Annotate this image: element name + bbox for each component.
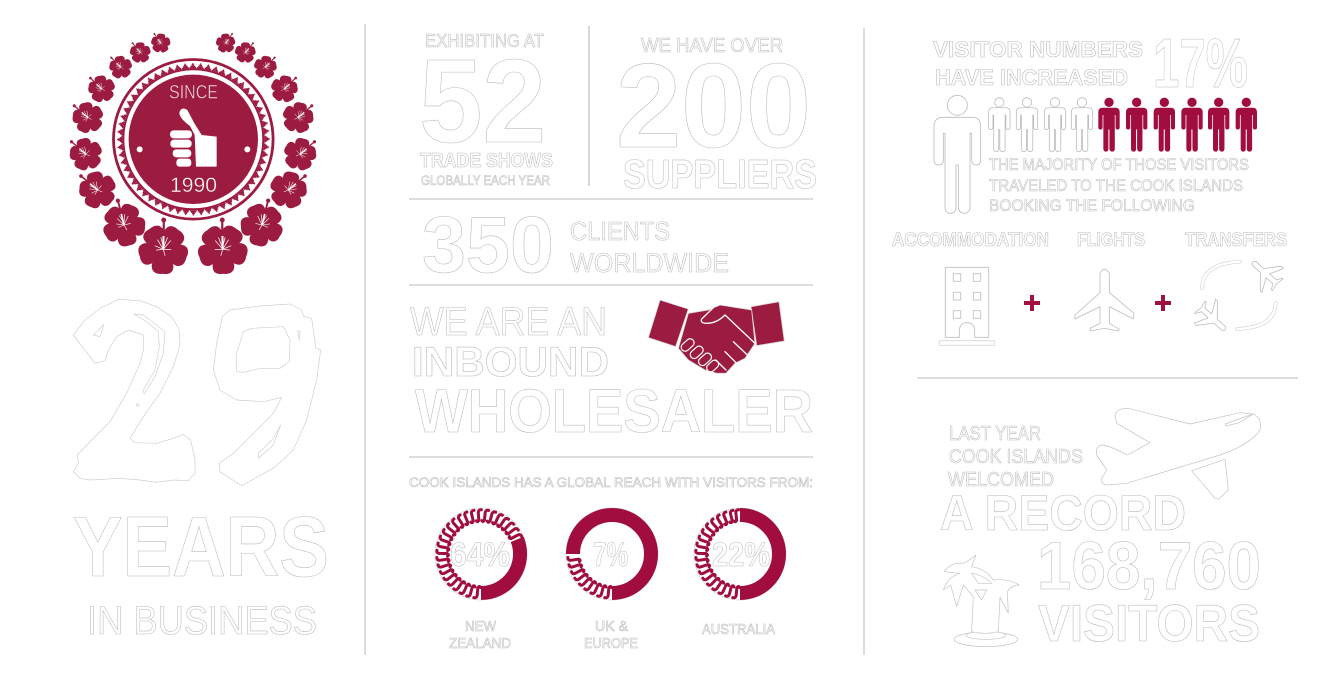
big number: 350: 350 [422,200,554,289]
heading: years: YEARS [73,500,329,595]
column dividers [365,24,864,655]
icon: plus [1155,295,1171,311]
text: visitors: VISITORS [1038,595,1260,653]
divider [409,284,813,286]
panel: years in business [67,30,329,643]
text: a record: A RECORD [940,485,1186,541]
icon: transfers cycle [1189,250,1289,342]
text: last year cook islands welcomed [948,423,1083,491]
label: flights: FLIGHTS [1077,230,1145,251]
panel: global reach [409,474,813,652]
text: last year cook islands welcomed: WELCOMED [948,469,1054,491]
divider [917,377,1298,379]
text: last year cook islands welcomed: LAST YEAR [949,423,1041,445]
donut: uk and europe 7% [566,508,658,600]
text: trade shows: TRADE SHOWS [420,150,553,172]
seal text: 1990: 1990 [170,174,217,197]
big number: 52: 52 [419,35,546,168]
heading: in business: IN BUSINESS [87,599,317,643]
divider [588,26,590,186]
heading: global reach: COOK ISLANDS HAS A GLOBAL REACH WITH VISITORS FROM: [409,474,813,490]
text: have increased: HAVE INCREASED [935,65,1128,90]
big number: 168,760: 168,760 [1037,528,1261,604]
badge: since 1990 wreath [67,30,319,286]
icon: hotel building [939,267,995,345]
icon: thumbs up [137,108,250,167]
panel: trade shows and suppliers [419,26,817,197]
value: 64%: 64% [450,536,510,574]
text: majority of visitors [989,155,1249,215]
icon: large person [934,95,981,213]
panel: clients worldwide [422,200,729,289]
text: clients: CLIENTS [570,216,670,246]
seal disc [129,75,258,204]
divider [409,198,813,200]
icon: airplane taking off [1096,408,1261,499]
panel: record visitors [940,408,1261,653]
label: uk and europe: EUROPE [584,635,638,652]
value: 22%: 22% [712,536,770,574]
text: majority of visitors: BOOKING THE FOLLOWING [989,196,1195,215]
big number: 17%: 17% [1153,24,1248,102]
donut: australia 22% [694,508,786,600]
panel: visitor numbers [933,24,1257,215]
label: uk and europe [584,618,638,652]
text: visitor numbers: VISITOR NUMBERS [933,37,1143,62]
seal text: since: SINCE [169,82,218,104]
label: accommodation: ACCOMMODATION [892,230,1049,251]
text: we have over: WE HAVE OVER [641,35,783,57]
panel: bookings [892,230,1289,345]
text: majority of visitors: THE MAJORITY OF THOSE VISITORS [989,155,1249,174]
divider [409,456,813,458]
icon: handshake [648,300,784,373]
text: worldwide: WORLDWIDE [570,248,729,278]
text: exhibiting at: EXHIBITING AT [425,31,544,51]
label: transfers: TRANSFERS [1185,230,1287,251]
label: uk and europe: UK & [595,618,628,635]
label: australia: AUSTRALIA [702,621,775,638]
label: new zealand: NEW [465,618,497,635]
label: new zealand: ZEALAND [449,635,511,652]
icon: palm tree island [943,555,1019,647]
text: majority of visitors: TRAVELED TO THE COOK ISLANDS [989,176,1243,195]
value: 7%: 7% [593,536,628,574]
text: wholesaler: WHOLESALER [415,377,813,445]
big number: 29 [73,299,321,486]
icon: airplane [1075,269,1134,331]
donut: new zealand 64% [435,508,527,600]
icon: hibiscus wreath [67,30,319,286]
text: globally each year: GLOBALLY EACH YEAR [421,173,550,188]
text: we are an: WE ARE AN [410,300,607,344]
text: suppliers: SUPPLIERS [623,151,817,197]
label: new zealand [449,618,511,652]
panel: inbound wholesaler [410,300,813,445]
pictogram: ten people [989,98,1257,152]
icon: plus [1024,295,1040,311]
text: inbound: INBOUND [412,338,609,385]
seal ring [114,60,273,219]
text: last year cook islands welcomed: COOK ISLANDS [949,446,1083,468]
big number: 200: 200 [616,39,811,173]
